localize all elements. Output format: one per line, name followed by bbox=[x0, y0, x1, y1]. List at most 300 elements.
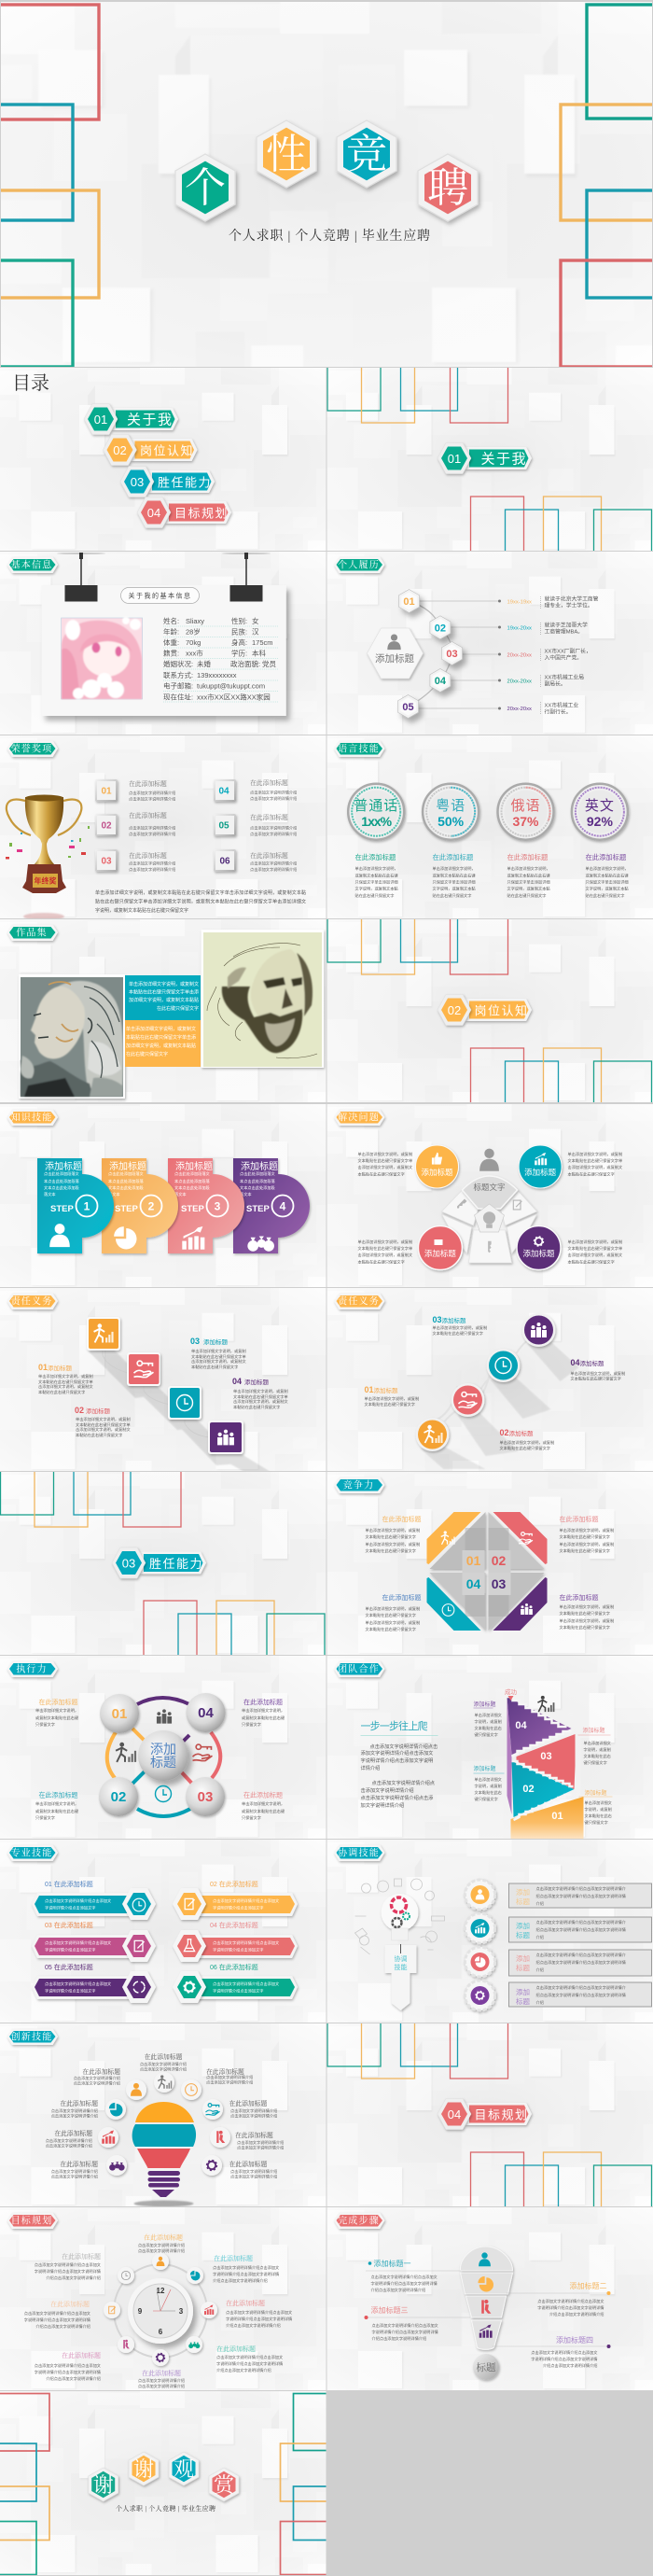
icon: gold trophy bbox=[6, 795, 90, 920]
heading tag bbox=[334, 556, 384, 573]
step two: 点击添加文字说明详情介绍点击添加文 bbox=[537, 2298, 604, 2304]
bar 01: 字说明详情介绍点击添加文字 bbox=[45, 1904, 95, 1911]
panel: thank-you slide bbox=[0, 2391, 326, 2575]
heading tag: 语言技能 bbox=[338, 743, 380, 754]
panel: section 04 bbox=[326, 2023, 653, 2206]
award number badges: 01 bbox=[101, 786, 112, 797]
step three: 添加标题三 bbox=[371, 2305, 409, 2315]
orbit descriptions: 点击添加文字说明详情介绍 bbox=[46, 2137, 92, 2144]
text block 01: 01 bbox=[38, 1363, 48, 1372]
text blocks: 在此添加标题 bbox=[39, 1698, 78, 1706]
description boxes: 介绍 bbox=[535, 1900, 544, 1907]
node descriptions: 介绍点击添加文字说明详情介绍 bbox=[35, 2323, 90, 2330]
personal info fields: 电子邮箱: bbox=[163, 681, 193, 691]
text block 04: 04 bbox=[232, 1377, 242, 1386]
text blocks: 单击添加详细文字说明， bbox=[35, 1707, 78, 1714]
text block blue bbox=[366, 1593, 422, 1632]
bulb and pencil figure: 技能 bbox=[394, 1963, 407, 1971]
description boxes: 添加 bbox=[516, 1887, 530, 1897]
paragraph: 字说明详情介绍点击添加文字说明 bbox=[360, 1757, 433, 1764]
personal info fields: 年龄: bbox=[163, 627, 179, 637]
description boxes: 点击添加文字说明详情介绍点击添加文字说明详情介 bbox=[535, 1885, 627, 1892]
timeline lines bbox=[418, 601, 500, 708]
award text blocks: 在此添加标题 bbox=[129, 851, 167, 860]
title hexagons: 个性竞聘 bbox=[175, 120, 478, 221]
spheres: 01 bbox=[112, 1706, 127, 1722]
heading tag bbox=[7, 1294, 58, 1309]
title hexagons: 个性竞聘: 竞 bbox=[346, 132, 387, 177]
folded octagon diagram: 02 bbox=[492, 1553, 506, 1568]
subtitle: 个人求职 | 个人竞聘 | 毕业生应聘 bbox=[116, 2504, 215, 2513]
text block 01: 文本黏贴在此右键只保留文字单 bbox=[38, 1379, 93, 1385]
staircase infographic: 04 bbox=[515, 1720, 527, 1731]
heading tag: 个人履历 bbox=[338, 558, 380, 571]
text panel: orange bbox=[125, 1020, 201, 1067]
text block 01: 单击添加详细文字说明，或复制 bbox=[364, 1395, 419, 1402]
language text blocks: 在此添加标题 bbox=[433, 853, 474, 861]
step 2: STEP bbox=[115, 1204, 138, 1214]
language text blocks: 单击添加详细文字说明， bbox=[354, 865, 398, 872]
node descriptions: 点击添加文字说明详情介绍点击添加文 bbox=[216, 2354, 284, 2360]
language text blocks: 在此添加标题 bbox=[507, 853, 549, 861]
diagonal shadow bbox=[420, 1338, 578, 1469]
section frames bbox=[327, 2019, 651, 2221]
panel: table of contents bbox=[0, 368, 326, 551]
text panel: orange: 本黏贴在此右键只保留文字单击添 bbox=[126, 1034, 196, 1041]
timeline entries: 工商管理MBA。 bbox=[545, 627, 583, 635]
personal info fields: 女 bbox=[252, 616, 259, 625]
stair labels: 键只保留文字 bbox=[474, 1731, 498, 1738]
bar 04: 04 在此添加标题 bbox=[210, 1921, 258, 1929]
orbit descriptions: 点击添加文字说明详情介绍 bbox=[51, 2173, 98, 2180]
timeline entries: 20xx-20xx bbox=[507, 653, 532, 659]
node descriptions: 字说明详情介绍点击添加文字说明详情 bbox=[213, 2271, 279, 2277]
heading tag bbox=[334, 1477, 384, 1493]
text blocks: 在此添加标题 bbox=[243, 1790, 283, 1799]
heading tag bbox=[7, 1661, 58, 1677]
stair labels: 添加标题 bbox=[582, 1727, 605, 1734]
node titles: 在此添加标题 bbox=[50, 2300, 90, 2308]
orbit descriptions: 点击添加文字说明详情介绍 bbox=[51, 2107, 98, 2114]
node descriptions: 介绍点击添加文字说明详情介绍 bbox=[46, 2275, 101, 2281]
paragraph bbox=[360, 1743, 438, 1809]
orbit labels: 在此添加标题 bbox=[82, 2067, 120, 2076]
heading tag: 荣誉奖项 bbox=[11, 743, 52, 754]
gauge: 普通话: 普通话 bbox=[354, 798, 398, 814]
panel: responsibilities (squares) bbox=[0, 1288, 326, 1471]
step four: 字说明详情介绍点击添加文字说明详情 bbox=[531, 2356, 597, 2362]
circle: purple bbox=[517, 1226, 561, 1269]
orbit labels: 在此添加标题 bbox=[229, 2099, 267, 2107]
text block 04 bbox=[232, 1377, 288, 1410]
panel: goal planning bbox=[0, 2207, 326, 2390]
text block 03: 单击添加详细文字说明，或复制 bbox=[433, 1324, 487, 1331]
heading tag: 协调技能 bbox=[338, 1846, 380, 1859]
orbit labels: 在此添加标题 bbox=[54, 2129, 92, 2137]
node descriptions: 点击添加文字说明详情介绍点击添加文 bbox=[24, 2310, 91, 2317]
gauge: 俄语: 俄语 bbox=[510, 798, 541, 814]
section banner: 目标规划: 04 bbox=[448, 2107, 461, 2121]
step two: 添加标题二 bbox=[569, 2281, 606, 2290]
timeline entries: 行副行长。 bbox=[545, 707, 571, 715]
personal info fields: 本科 bbox=[252, 648, 266, 657]
timeline entries: 19xx-19xx bbox=[507, 599, 532, 605]
panel: honors and awards: 点击添加文字说明详情介绍 bbox=[129, 831, 175, 837]
text block 04: 添加标题 bbox=[580, 1359, 604, 1367]
text block 02: 02 bbox=[75, 1406, 84, 1415]
title hexagons: 个性竞聘: 个 bbox=[185, 165, 226, 211]
description boxes: 标题 bbox=[516, 1996, 530, 2006]
timeline nodes: 05 bbox=[402, 702, 414, 713]
text block 03: 添加标题 bbox=[203, 1337, 228, 1346]
item 03 bbox=[120, 467, 215, 497]
text panel: orange: 单击添加详细文字说明，或复制文 bbox=[126, 1026, 196, 1032]
panel: responsibilities (circles) bbox=[326, 1288, 653, 1471]
node descriptions: 点击添加文字说明详情介绍点击添加文 bbox=[35, 2261, 102, 2268]
gauge: 粤语: 粤语 bbox=[436, 797, 465, 814]
circle: blue bbox=[519, 1145, 562, 1188]
award text blocks: 在此添加标题 bbox=[129, 779, 167, 788]
panel: section 02 bbox=[326, 919, 653, 1102]
step three bbox=[364, 2305, 470, 2342]
node titles: 在此添加标题 bbox=[226, 2299, 265, 2307]
award number badges: 05 bbox=[218, 821, 229, 831]
heading: 一步一步往上爬 bbox=[360, 1719, 438, 1736]
stair labels bbox=[474, 1701, 613, 1826]
central segmented diagram: 标题文字 bbox=[473, 1183, 506, 1192]
timeline entries: XX市机械工业局 bbox=[545, 674, 584, 681]
circle nodes with icons bbox=[416, 1313, 556, 1451]
text block 01: 01 bbox=[364, 1385, 374, 1394]
heading tag: 专业技能 bbox=[11, 1846, 52, 1859]
base circle: 标题 bbox=[476, 2361, 496, 2373]
text block 01: 添加标题 bbox=[373, 1386, 398, 1394]
title hexagons: 谢谢观赏 bbox=[89, 2452, 239, 2501]
title hexagons: 个性竞聘: 性 bbox=[266, 132, 307, 177]
personal info fields: 民族: bbox=[231, 627, 247, 637]
personal info fields: 139xxxxxxxx bbox=[197, 671, 237, 679]
heading tag bbox=[7, 2212, 58, 2229]
description blocks: 单击添加详细文字说明，或复制 bbox=[358, 1151, 412, 1157]
description boxes: 标题 bbox=[516, 1963, 530, 1972]
text block 04: 添加标题 bbox=[244, 1378, 269, 1386]
gauge: 俄语 bbox=[498, 784, 554, 840]
card title pill bbox=[121, 588, 200, 603]
language text blocks: 文字说明，或复制文本黏 bbox=[354, 885, 398, 892]
paragraph: 点击添加文字说明详情介绍点击添 bbox=[360, 1794, 434, 1801]
text block 03: 03 bbox=[190, 1337, 200, 1346]
item 01 bbox=[84, 403, 178, 435]
heading tag: 责任义务 bbox=[11, 1295, 52, 1307]
node descriptions: 字说明详情介绍点击添加文字说明详情 bbox=[35, 2268, 101, 2275]
personal info fields: 28岁 bbox=[186, 627, 201, 637]
step 4: 添加标题 bbox=[241, 1160, 278, 1172]
section banner: 岗位认知 bbox=[438, 995, 532, 1025]
timeline entries: XX市机械工业 bbox=[545, 702, 578, 709]
folded octagon diagram: 03 bbox=[492, 1576, 506, 1591]
orbit labels: 在此添加标题 bbox=[60, 2099, 98, 2107]
item 02 bbox=[103, 435, 198, 465]
item 01: 关于我 bbox=[127, 413, 174, 427]
timeline entries: 就读于芝加哥大学 bbox=[545, 622, 588, 629]
heading tag bbox=[7, 741, 58, 757]
node descriptions: 字说明详情介绍点击添加文字说明详情 bbox=[35, 2369, 101, 2375]
panel: honors and awards: 点击添加文字说明详情介绍 bbox=[250, 831, 297, 837]
award text blocks: 在此添加标题 bbox=[129, 811, 167, 819]
orbit descriptions: 点击添加文字说明详情介绍 bbox=[46, 2143, 92, 2149]
paragraph: 详情介绍 bbox=[360, 1764, 380, 1771]
heading tag: 完成步骤 bbox=[338, 2214, 380, 2227]
heading tag: 目标规划 bbox=[11, 2214, 52, 2227]
language text blocks bbox=[354, 853, 629, 899]
panel: completion steps bbox=[326, 2207, 653, 2390]
text panel: blue bbox=[125, 975, 201, 1020]
heading tag bbox=[334, 1294, 384, 1309]
bulb and pencil figure: 协调 bbox=[394, 1954, 407, 1963]
gauge: 俄语: 37% bbox=[512, 814, 539, 829]
text block 02 bbox=[75, 1406, 131, 1438]
clock dial: 9 bbox=[138, 2307, 143, 2316]
staircase infographic: 成功 bbox=[505, 1687, 517, 1696]
clock dial bbox=[114, 2264, 207, 2358]
central hexagon: 添加标题 bbox=[375, 652, 414, 665]
orbit descriptions: 点击添加文字说明详情介绍 bbox=[230, 2173, 277, 2180]
heading tag: 团队合作 bbox=[338, 1663, 380, 1674]
center sphere: 标题 bbox=[150, 1755, 176, 1770]
bar 03: 03 在此添加标题 bbox=[45, 1921, 93, 1929]
bar 05: 05 在此添加标题 bbox=[45, 1963, 93, 1971]
heading tag bbox=[334, 1661, 384, 1677]
orbit descriptions: 点击添加文字说明详情介绍 bbox=[206, 2074, 253, 2080]
heading tag: 基本信息 bbox=[11, 558, 52, 571]
item 03: 胜任能力 bbox=[158, 476, 212, 489]
step one: 介绍点击添加文字说明详情介绍 bbox=[371, 2287, 425, 2293]
card title pill: 关于我的基本信息 bbox=[129, 592, 192, 599]
item 04 bbox=[137, 497, 231, 528]
node descriptions: 点击添加文字说明详情介绍 bbox=[138, 2383, 185, 2389]
stair labels: 添加标题 bbox=[474, 1765, 496, 1772]
node descriptions: 点击添加文字说明详情介绍点击添加文 bbox=[213, 2264, 280, 2271]
orbit labels: 在此添加标题 bbox=[229, 2160, 267, 2168]
step one: 字说明详情介绍点击添加文字说明详情 bbox=[371, 2280, 438, 2287]
step one: 点击添加文字说明详情介绍点击添加文 bbox=[371, 2274, 438, 2280]
timeline nodes: 01 bbox=[403, 596, 415, 608]
long diagonal shadow bbox=[89, 1348, 271, 1472]
clock dial: 3 bbox=[179, 2307, 184, 2316]
step four: 添加标题四 bbox=[556, 2335, 593, 2345]
text block 04: 04 bbox=[571, 1358, 580, 1367]
heading tag: 责任义务 bbox=[338, 1295, 380, 1307]
text block red: 在此添加标题 bbox=[560, 1515, 599, 1523]
subtitle: 个人求职 | 个人竞聘 | 毕业生应聘 bbox=[229, 228, 430, 244]
text block orange: 单击添加详细文字说明，或复制 bbox=[366, 1541, 420, 1547]
step four: 点击添加文字说明详情介绍点击添加文 bbox=[531, 2349, 598, 2356]
bar 06: 06 在此添加标题 bbox=[210, 1963, 258, 1971]
section banner: 胜任能力: 03 bbox=[122, 1557, 135, 1570]
step 3: STEP bbox=[181, 1204, 204, 1214]
node titles: 在此添加标题 bbox=[62, 2351, 101, 2359]
node descriptions bbox=[24, 2242, 293, 2389]
personal info fields: xxx市 bbox=[186, 648, 203, 657]
text panel: orange: 加详细文字说明，或复制文本黏贴 bbox=[126, 1043, 196, 1049]
text block 02: 文本黏贴在此右键只保留文字 bbox=[500, 1445, 550, 1451]
icon: gold trophy: 年终奖 bbox=[34, 875, 56, 885]
decorative colored frames bbox=[0, 2393, 340, 2574]
description blocks: 击添加详细文字说明，或复制文 bbox=[358, 1164, 413, 1170]
bar 04: 字说明详情介绍点击添加文字 bbox=[213, 1947, 263, 1953]
heading tag: 知识技能 bbox=[11, 1111, 52, 1124]
heading tag bbox=[7, 2029, 58, 2045]
text block 01: 添加标题 bbox=[48, 1364, 73, 1372]
personal info fields: 70kg bbox=[186, 638, 201, 647]
text block orange bbox=[366, 1515, 422, 1554]
paragraph: 点击添加文字说明详情介绍点击 bbox=[369, 1743, 438, 1750]
node titles: 在此添加标题 bbox=[142, 2369, 181, 2377]
personal info fields bbox=[163, 616, 278, 702]
heading tag: 创新技能 bbox=[11, 2031, 52, 2042]
heading: 一步一步往上爬: 一步一步往上爬 bbox=[360, 1719, 427, 1732]
item 01: 01 bbox=[94, 413, 107, 427]
step two: 介绍点击添加文字说明详情介绍 bbox=[549, 2311, 604, 2317]
text block 04: 文本黏贴在此右键只保留文字 bbox=[571, 1376, 621, 1381]
language text blocks: 只保留文字单击添加详细 bbox=[354, 879, 398, 885]
clock dial: 12 bbox=[157, 2287, 165, 2295]
panel: professional skills bbox=[0, 1840, 326, 2023]
personal info fields: 党员 bbox=[262, 659, 276, 668]
personal info fields: Sliaxy bbox=[186, 617, 204, 625]
step one bbox=[366, 2259, 461, 2293]
text block 02: 单击添加详细文字说明，或复制 bbox=[500, 1439, 554, 1446]
step 2: 2 bbox=[148, 1200, 155, 1213]
text blocks bbox=[35, 1698, 285, 1821]
text block purple bbox=[560, 1593, 614, 1631]
text blocks: 只保留文字 bbox=[35, 1721, 55, 1728]
text block 01 bbox=[364, 1385, 419, 1407]
segmented lightbulb bbox=[132, 2102, 196, 2206]
language text blocks: 贴在此右键只保留文字 bbox=[354, 892, 394, 899]
circle: red: 添加标题 bbox=[424, 1249, 456, 1258]
photo: anime portrait bbox=[62, 617, 143, 699]
node descriptions: 介绍点击添加文字说明详情介绍 bbox=[46, 2375, 101, 2382]
panel: language skills bbox=[326, 735, 653, 918]
gear icon bullets bbox=[465, 1880, 494, 2010]
personal info fields: 籍贯: bbox=[163, 648, 179, 657]
orbit descriptions: 点击添加文字说明详情介绍 bbox=[230, 2107, 277, 2114]
award number badges: 06 bbox=[219, 857, 230, 866]
orbit labels: 在此添加标题 bbox=[206, 2067, 244, 2076]
bar 03 bbox=[32, 1921, 156, 1962]
step three: 字说明详情介绍点击添加文字说明详情 bbox=[371, 2329, 438, 2335]
orbit descriptions: 点击添加文字说明详情介绍 bbox=[206, 2079, 253, 2085]
heading: 目录: 目录 bbox=[12, 372, 49, 394]
bar 02 bbox=[173, 1880, 298, 1920]
award number badges bbox=[95, 779, 236, 872]
paragraph: 击添加文字说明详情介绍 bbox=[360, 1786, 414, 1794]
description blocks bbox=[358, 1151, 413, 1178]
step 4 bbox=[233, 1158, 310, 1253]
orbit labels: 在此添加标题 bbox=[60, 2160, 98, 2168]
text panel: blue: 本黏贴在此右键只保留文字单击添 bbox=[129, 989, 199, 995]
timeline nodes: 03 bbox=[446, 649, 458, 660]
panel: honors and awards: 点击添加文字说明详情介绍 bbox=[129, 861, 175, 866]
heading tag bbox=[7, 556, 58, 573]
node descriptions: 介绍点击添加文字说明详情介绍 bbox=[226, 2322, 281, 2329]
clock nodes bbox=[104, 2253, 217, 2366]
orbit labels bbox=[54, 2052, 273, 2168]
step 2 bbox=[102, 1158, 178, 1253]
timeline entries: 理专业，学士学位。 bbox=[545, 601, 593, 609]
heading tag bbox=[334, 2212, 384, 2229]
gauge: 英文 bbox=[572, 784, 628, 840]
clock dial: 6 bbox=[159, 2328, 163, 2336]
panel: honors and awards: 点击添加文字说明详情介绍 bbox=[250, 861, 297, 866]
orbit descriptions: 点击添加文字说明详情介绍 bbox=[230, 2168, 277, 2175]
gauge: 粤语: 50% bbox=[438, 814, 465, 829]
node titles bbox=[50, 2233, 265, 2377]
text panel: blue: 单击添加详细文字说明，或复制文 bbox=[129, 981, 199, 987]
circle: red bbox=[418, 1226, 462, 1269]
orbit descriptions: 点击添加文字说明详情介绍 bbox=[140, 2066, 187, 2072]
bar 04 bbox=[173, 1921, 298, 1962]
bulb and pencil figure bbox=[354, 1879, 444, 2010]
personal info fields: 姓名: bbox=[163, 616, 179, 625]
connector lines bbox=[103, 1349, 210, 1437]
step 1: STEP bbox=[50, 1204, 74, 1214]
section banner: 胜任能力: 胜任能力 bbox=[149, 1557, 203, 1571]
text block 03: 文本黏贴在此右键只保留文字 bbox=[433, 1330, 483, 1337]
central hexagon bbox=[368, 628, 424, 679]
gauge: 粤语 bbox=[423, 784, 479, 840]
heading tag: 竞争力 bbox=[343, 1478, 374, 1491]
award number badges: 03 bbox=[101, 857, 112, 866]
section banner: 岗位认知: 02 bbox=[448, 1003, 461, 1017]
circle: orange bbox=[416, 1145, 459, 1188]
title hexagons: 个性竞聘: 聘 bbox=[427, 165, 468, 211]
description boxes: 添加 bbox=[516, 1953, 530, 1963]
node titles: 在此添加标题 bbox=[62, 2252, 101, 2261]
bar 02: 字说明详情介绍点击添加文字 bbox=[213, 1904, 263, 1911]
title hexagons: 谢谢观赏: 谢 bbox=[133, 2457, 154, 2481]
section banner: 岗位认知: 岗位认知 bbox=[474, 1004, 529, 1017]
orbit descriptions: 点击添加文字说明详情介绍 bbox=[74, 2079, 120, 2087]
timeline entries: 19xx-20xx bbox=[507, 625, 532, 631]
text block 02: 02 bbox=[500, 1428, 509, 1437]
node descriptions: 介绍点击添加文字说明详情介绍 bbox=[216, 2367, 271, 2373]
step one: 添加标题一 bbox=[373, 2259, 410, 2268]
timeline entries: 入中国共产党。 bbox=[545, 653, 582, 661]
center sphere: 添加 bbox=[150, 1742, 176, 1757]
step 4: 落文本 bbox=[240, 1191, 252, 1197]
step 1 bbox=[37, 1158, 114, 1253]
panel: honors and awards: 点击添加文字说明详情介绍 bbox=[129, 866, 175, 873]
personal info fields: 汉 bbox=[252, 627, 259, 637]
heading tag bbox=[334, 1844, 384, 1861]
award number badges: 04 bbox=[218, 786, 229, 797]
title hexagons: 谢谢观赏: 谢 bbox=[93, 2473, 114, 2497]
bar 02: 点击添加文字说明详情介绍点击添加文 bbox=[213, 1897, 280, 1904]
text block 01: 本黏贴在此右键只保留文字 bbox=[38, 1389, 85, 1395]
node descriptions: 字说明详情介绍点击添加文字说明详情 bbox=[226, 2316, 292, 2322]
text blocks: 在此添加标题 bbox=[243, 1698, 283, 1706]
spheres bbox=[99, 1693, 226, 1816]
picture: bearded man sketch bbox=[201, 930, 324, 1068]
step two: 字说明详情介绍点击添加文字说明详情 bbox=[537, 2304, 604, 2311]
bar 04: 点击添加文字说明详情介绍点击添加文 bbox=[213, 1939, 280, 1946]
panel: honors and awards: 点击添加文字说明详情介绍 bbox=[250, 866, 297, 873]
text block 01: 单击添加详细文字说明，或复制 bbox=[38, 1373, 93, 1379]
personal info fields: 学历: bbox=[231, 648, 247, 657]
panel: honors and awards bbox=[0, 735, 326, 918]
